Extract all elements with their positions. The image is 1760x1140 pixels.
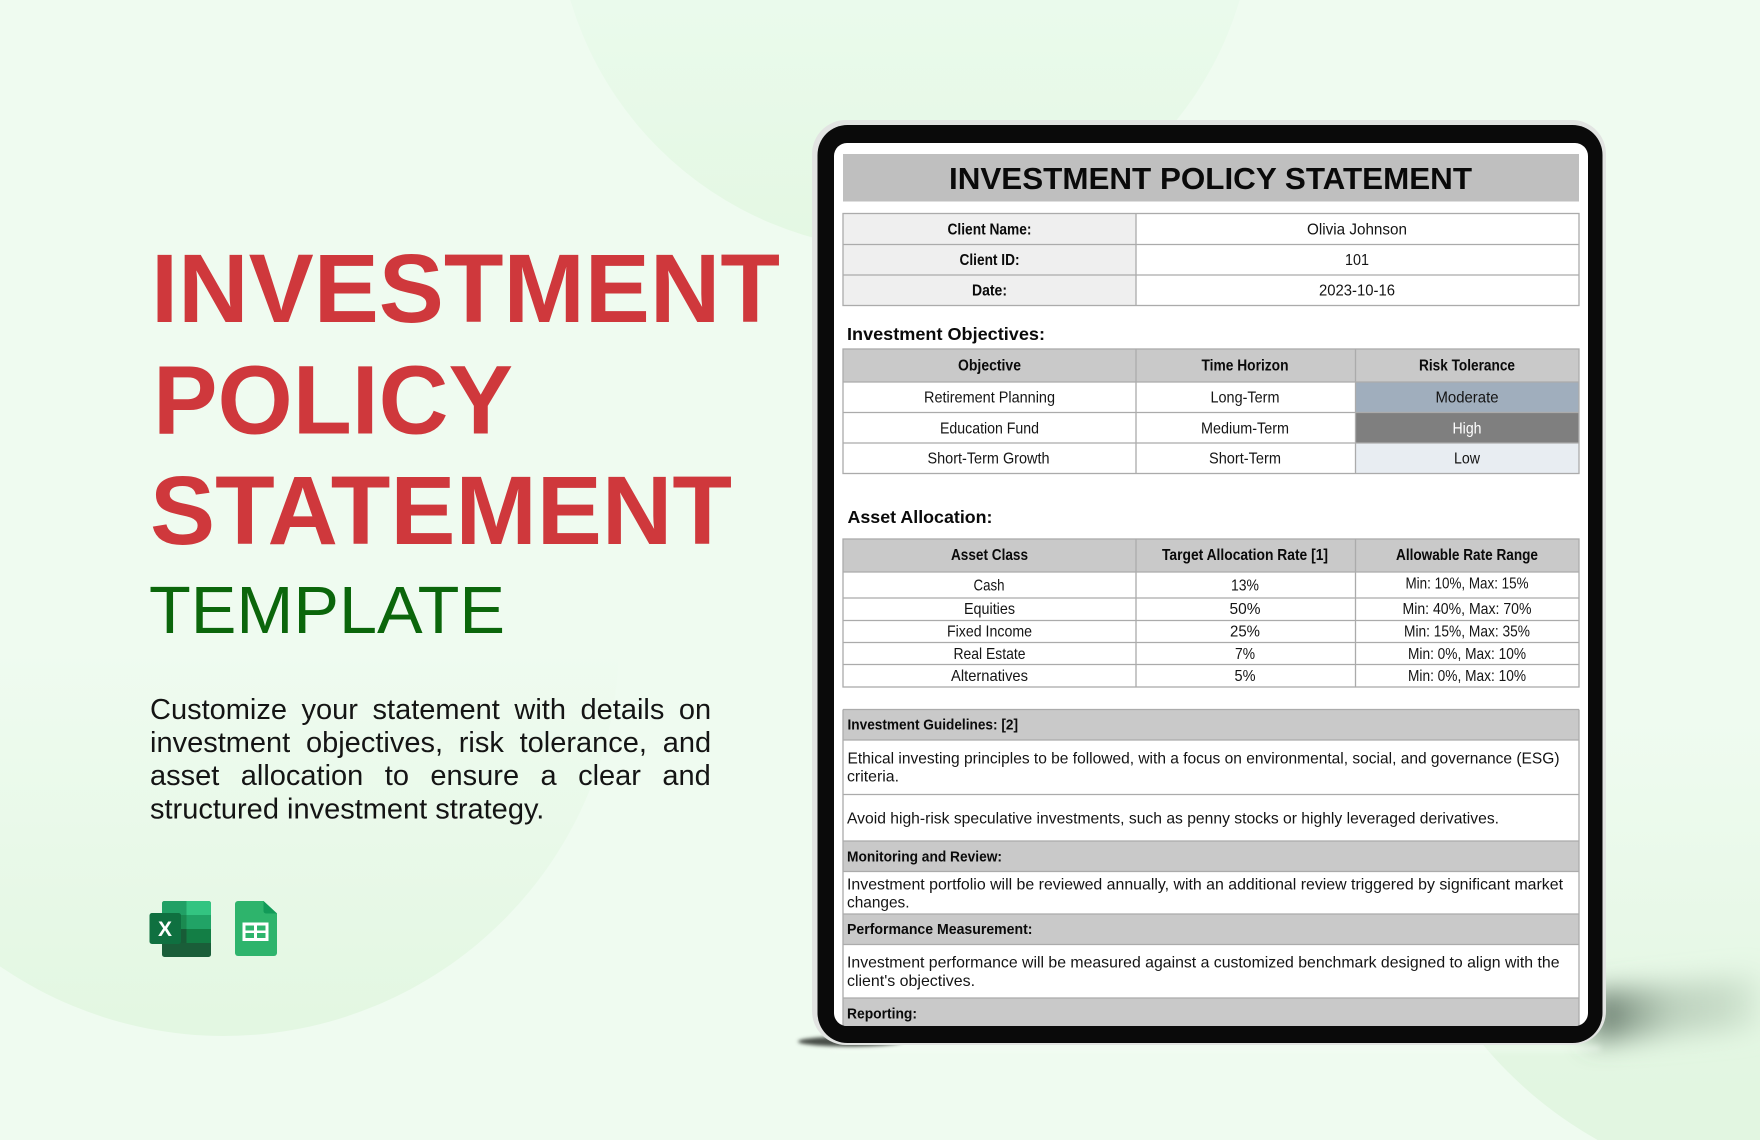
guidelines and review table: [843, 710, 1579, 1030]
document on tablet screen: [843, 154, 1579, 1030]
tablet frame: [812, 120, 1606, 1045]
asset allocation table: Min: 0%, Max: 10%: [1408, 646, 1526, 663]
investment objectives table: Time Horizon: [1202, 358, 1288, 374]
asset allocation table: Fixed Income: [947, 624, 1032, 640]
title: STATEMENT: [150, 456, 732, 565]
asset allocation table: Min: 10%, Max: 15%: [1406, 576, 1528, 592]
document title bar: INVESTMENT POLICY STATEMENT: [949, 161, 1472, 196]
subtitle: TEMPLATE: [149, 573, 505, 648]
heading: investment objectives: Investment Objectives:: [847, 324, 1045, 344]
investment objectives table: Education Fund: [940, 420, 1039, 438]
client details table: Client ID:: [960, 252, 1020, 269]
description: [150, 694, 711, 826]
description: Customize your statement with details on: [150, 694, 711, 726]
client details table: 101: [1345, 252, 1369, 269]
guidelines and review table: Performance Measurement:: [847, 921, 1032, 938]
asset allocation table: Min: 0%, Max: 10%: [1408, 668, 1526, 685]
asset allocation table: Alternatives: [951, 668, 1028, 685]
title: POLICY: [153, 346, 513, 454]
investment objectives table: Objective: [958, 358, 1021, 374]
investment objectives table: Short-Term: [1209, 450, 1281, 468]
asset allocation table: 50%: [1230, 601, 1260, 618]
guidelines and review table: criteria.: [847, 768, 899, 786]
asset allocation table: Min: 40%, Max: 70%: [1402, 601, 1532, 618]
client details table: Client Name:: [948, 222, 1032, 238]
investment objectives table: Low: [1454, 450, 1480, 468]
asset allocation table: 5%: [1234, 668, 1256, 685]
asset allocation table: [843, 539, 1579, 687]
client details table: 2023-10-16: [1319, 282, 1395, 300]
investment objectives table: High: [1452, 420, 1482, 438]
investment objectives table: Long-Term: [1210, 390, 1280, 406]
guidelines and review table: Ethical investing principles to be followed, with a focus on environmental, social, and governance (ESG): [848, 750, 1560, 768]
guidelines and review table: Reporting:: [847, 1006, 917, 1022]
guidelines and review table: Investment Guidelines: [2]: [848, 716, 1018, 734]
asset allocation table: Asset Class: [951, 547, 1028, 564]
asset allocation table: Cash: [974, 578, 1004, 594]
guidelines and review table: changes.: [847, 894, 910, 912]
investment objectives table: Risk Tolerance: [1419, 358, 1515, 374]
asset allocation table: Real Estate: [954, 646, 1026, 663]
asset allocation table: Target Allocation Rate [1]: [1162, 547, 1328, 564]
description: asset allocation to ensure a clear and: [150, 760, 711, 792]
investment objectives table: Short-Term Growth: [928, 450, 1050, 468]
heading: asset allocation: Asset Allocation:: [848, 507, 992, 527]
title: [150, 234, 780, 565]
asset allocation table: 25%: [1230, 624, 1260, 640]
investment objectives table: [843, 349, 1579, 474]
guidelines and review table: Avoid high-risk speculative investments, such as penny stocks or highly leveraged derivatives.: [847, 810, 1499, 828]
client details table: Olivia Johnson: [1307, 222, 1407, 238]
asset allocation table: Equities: [964, 601, 1015, 618]
icon: excel: [150, 901, 211, 957]
icon: google sheets: [235, 901, 277, 956]
asset allocation table: Allowable Rate Range: [1396, 547, 1538, 564]
investment objectives table: Retirement Planning: [924, 390, 1055, 406]
guidelines and review table: client's objectives.: [847, 973, 975, 990]
tablet shadow: [798, 975, 1760, 1051]
description: investment objectives, risk tolerance, and: [150, 727, 711, 759]
guidelines and review table: Monitoring and Review:: [847, 848, 1002, 866]
description: structured investment strategy.: [150, 794, 544, 826]
client details table: [843, 214, 1579, 306]
guidelines and review table: Investment portfolio will be reviewed annually, with an additional review triggered by significant market: [847, 876, 1564, 894]
icon: excel: X: [158, 918, 172, 941]
client details table: Date:: [972, 282, 1007, 300]
asset allocation table: 13%: [1231, 578, 1259, 594]
title: INVESTMENT: [151, 234, 780, 343]
investment objectives table: Medium-Term: [1201, 420, 1289, 438]
asset allocation table: Min: 15%, Max: 35%: [1404, 624, 1530, 640]
investment objectives table: Moderate: [1436, 390, 1499, 406]
document title bar: [843, 154, 1579, 202]
asset allocation table: 7%: [1235, 646, 1255, 663]
guidelines and review table: Investment performance will be measured against a customized benchmark designed to align with the: [847, 954, 1560, 972]
